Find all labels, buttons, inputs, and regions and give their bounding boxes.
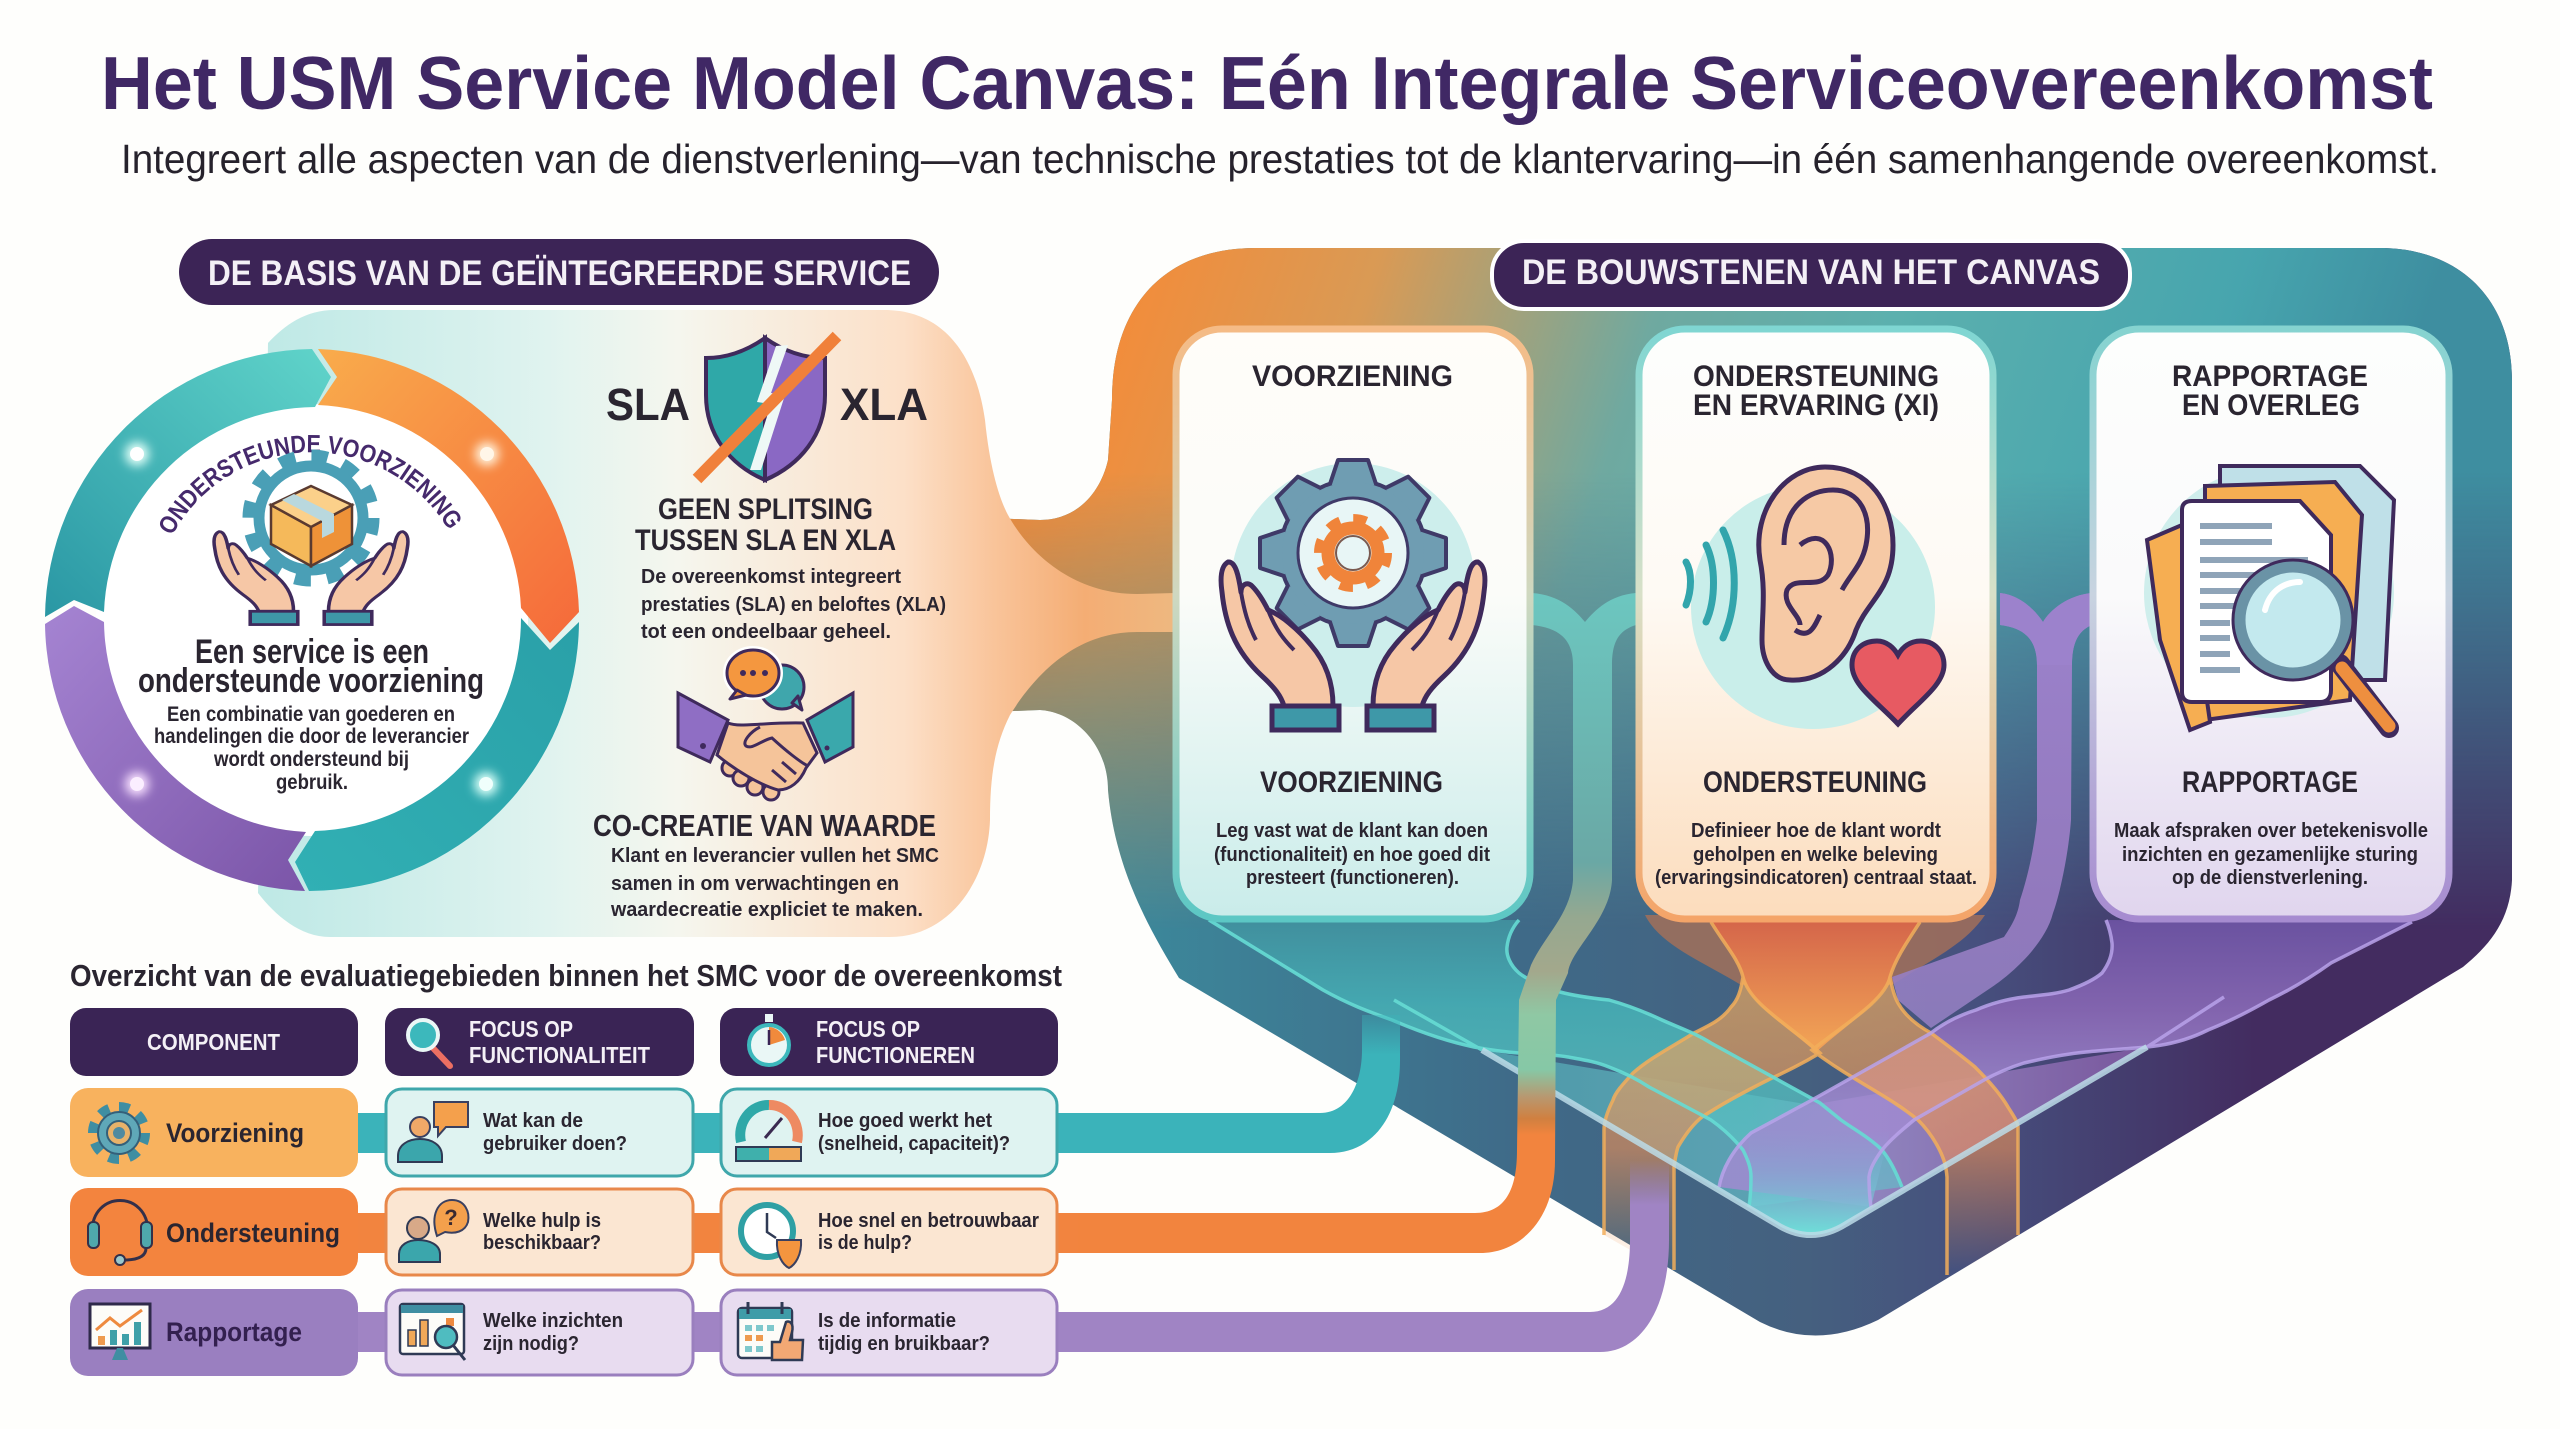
text: service definition: gebruik. — [276, 771, 348, 794]
card: rapportage en overleg: EN OVERLEG — [2182, 389, 2360, 422]
card: rapportage en overleg: RAPPORTAGE — [2182, 766, 2358, 799]
cell: is de informatie: tijdig en bruikbaar? — [818, 1333, 990, 1355]
ribbon: purple Y connector top — [2000, 593, 2092, 665]
text: service definition — [138, 633, 484, 794]
pill: de bouwstenen — [1492, 241, 2130, 309]
cell: hoe snel — [721, 1189, 1057, 1275]
pill: de bouwstenen: DE BOUWSTENEN VAN HET CANVAS — [1522, 253, 2100, 292]
table header: component — [70, 1008, 358, 1076]
text: service definition: ondersteunde voorziening — [138, 662, 484, 700]
table header: focus op functionaliteit — [385, 1008, 694, 1076]
teal ribbon outlines — [1209, 920, 1902, 1207]
text: co-creatie: CO-CREATIE VAN WAARDE — [593, 808, 936, 843]
purple ribbon outlines — [1719, 920, 2412, 1207]
title: Het USM Service Model Canvas: Eén Integrale Serviceovereenkomst — [101, 41, 2433, 125]
cell: welke hulp: Welke hulp is — [483, 1210, 601, 1232]
ring segment: orange top-right — [318, 349, 579, 643]
ring segment: teal lower-right — [295, 618, 579, 891]
cell: is de informatie — [721, 1290, 1057, 1375]
V frame — [1482, 1047, 2147, 1235]
subtitle: Integreert alle aspecten van de dienstverlening—van technische prestaties tot de klantervaring—in één samenhangende overeenkomst. — [121, 136, 2439, 182]
cell: welke hulp: beschikbaar? — [483, 1232, 601, 1254]
curved label — [172, 452, 452, 536]
card: rapportage en overleg — [2093, 329, 2449, 919]
icon: stopwatch — [749, 1014, 789, 1065]
cell: is de informatie: Is de informatie — [818, 1310, 956, 1332]
connector: purple row band — [358, 1160, 1669, 1352]
card: ondersteuning en ervaring: EN ERVARING (XI) — [1693, 389, 1939, 422]
ring segment: teal top-left — [45, 349, 331, 617]
cell: welke hulp — [386, 1189, 693, 1275]
text: geen splitsing: prestaties (SLA) en beloftes (XLA) — [641, 594, 946, 616]
V tip glow — [1749, 1130, 1890, 1235]
purple ribbon — [1719, 920, 2412, 1207]
icon: magnifier — [408, 1020, 450, 1066]
card: voorziening: Leg vast wat de klant kan doen — [1216, 820, 1488, 842]
text: service definition: handelingen die door de leverancier — [154, 725, 469, 748]
card: ondersteuning en ervaring: ONDERSTEUNING — [1703, 766, 1927, 799]
card: ondersteuning en ervaring: geholpen en welke beleving — [1693, 844, 1938, 866]
cell: hoe snel: is de hulp? — [818, 1232, 912, 1254]
text: service definition: Een combinatie van goederen en — [167, 703, 455, 726]
card: voorziening: VOORZIENING — [1252, 360, 1453, 393]
ribbon: teal Y connector into orange row — [1058, 593, 1636, 1253]
card: ondersteuning en ervaring: ONDERSTEUNING — [1693, 360, 1939, 393]
pill: de basis — [179, 239, 939, 305]
row: ondersteuning — [70, 1188, 1057, 1276]
icon: gear with box and hands — [214, 456, 408, 625]
card: rapportage en overleg: Maak afspraken over betekenisvolle — [2114, 820, 2428, 842]
connector: orange row band — [358, 1213, 1078, 1253]
cell: hoe goed werkt het: (snelheid, capaciteit)? — [818, 1133, 1010, 1155]
orange strand outlines — [1604, 922, 2018, 1275]
purple descending stem — [1892, 593, 2092, 1028]
cell: ondersteuning label — [70, 1188, 358, 1276]
card: ondersteuning en ervaring: Definieer hoe de klant wordt — [1691, 820, 1941, 842]
cell: welke hulp: ? — [444, 1205, 458, 1230]
orange strand right — [1812, 977, 2018, 1280]
card: rapportage en overleg: op de dienstverlening. — [2172, 867, 2368, 889]
cell: voorziening label: Voorziening — [166, 1118, 304, 1148]
table header: focus op functionaliteit: FUNCTIONALITEIT — [469, 1042, 650, 1068]
text: geen splitsing — [635, 493, 946, 643]
card: voorziening: VOORZIENING — [1260, 766, 1443, 799]
text: service definition: Een service is een — [195, 633, 429, 671]
block: SLA XLA shield: XLA — [840, 379, 928, 430]
card: voorziening: (functionaliteit) en hoe goed dit — [1214, 844, 1490, 866]
connector: purple row band solid — [358, 1312, 1598, 1352]
table header: focus op functioneren — [720, 1008, 1058, 1076]
text: co-creatie: samen in om verwachtingen en — [611, 873, 899, 895]
row: voorziening — [70, 1088, 1057, 1177]
ring segment: purple lower-left — [45, 606, 306, 891]
card: ondersteuning en ervaring: (ervaringsindicatoren) centraal staat. — [1655, 867, 1977, 889]
cell: wat kan de gebruiker doen: Wat kan de — [483, 1110, 583, 1132]
table heading: Overzicht van de evaluatiegebieden binnen het SMC voor de overeenkomst — [70, 958, 1062, 993]
cell: hoe goed werkt het — [721, 1089, 1057, 1176]
card: rapportage en overleg: RAPPORTAGE — [2172, 360, 2368, 393]
panel: canvas shape background — [990, 248, 2512, 1336]
cell: wat kan de gebruiker doen — [386, 1089, 693, 1176]
orange strand left — [1604, 977, 1820, 1275]
ribbons: central interwoven flow — [1209, 593, 2412, 1280]
ring glow dots — [125, 442, 499, 796]
cell: welke inzichten: Welke inzichten — [483, 1310, 623, 1332]
cell: rapportage label — [70, 1289, 358, 1376]
card: voorziening — [1176, 329, 1530, 919]
text: co-creatie — [593, 808, 939, 921]
cell: welke inzichten — [386, 1290, 693, 1375]
connector: teal row band — [358, 1015, 1400, 1153]
cell: wat kan de gebruiker doen: gebruiker doen? — [483, 1133, 627, 1155]
ring diagram — [45, 349, 579, 891]
pill: de basis: DE BASIS VAN DE GEÏNTEGREERDE SERVICE — [208, 254, 911, 293]
icon: documents with magnifier — [2144, 466, 2394, 730]
cell: hoe snel: Hoe snel en betrouwbaar — [818, 1210, 1039, 1232]
card: voorziening: presteert (functioneren). — [1246, 867, 1459, 889]
cell: voorziening label — [70, 1088, 358, 1177]
table header: focus op functioneren: FOCUS OP — [816, 1016, 920, 1042]
cell: hoe goed werkt het: Hoe goed werkt het — [818, 1110, 992, 1132]
text: service definition: wordt ondersteund bij — [213, 748, 409, 771]
cell: ondersteuning label: Ondersteuning — [166, 1218, 340, 1248]
cell: rapportage label: Rapportage — [166, 1317, 302, 1347]
orange flare at card base — [1645, 915, 1985, 985]
table header: focus op functioneren: FUNCTIONEREN — [816, 1042, 975, 1068]
icon: handshake with speech bubbles — [678, 649, 853, 800]
block: SLA XLA shield — [606, 336, 928, 480]
panel: basis background with connector — [258, 310, 1175, 937]
text: co-creatie: waardecreatie expliciet te maken. — [610, 899, 923, 921]
ring diagram: ONDERSTEUNDE VOORZIENING — [160, 435, 461, 532]
block: SLA XLA shield: SLA — [606, 379, 690, 430]
card: rapportage en overleg: inzichten en gezamenlijke sturing — [2122, 844, 2418, 866]
row: rapportage — [70, 1289, 1057, 1376]
icon: gears in hands — [1221, 460, 1485, 730]
orange centre — [1711, 920, 1920, 1052]
icon: ear with heart — [1686, 467, 1944, 729]
text: geen splitsing: De overeenkomst integreert — [641, 566, 901, 588]
teal ribbon — [1209, 920, 1902, 1207]
cell: welke inzichten: zijn nodig? — [483, 1333, 579, 1355]
text: geen splitsing: TUSSEN SLA EN XLA — [635, 524, 896, 557]
table header: component: COMPONENT — [147, 1029, 280, 1055]
text: geen splitsing: GEEN SPLITSING — [658, 493, 873, 526]
table header: focus op functionaliteit: FOCUS OP — [469, 1016, 573, 1042]
V base — [1482, 1047, 2147, 1235]
text: co-creatie: Klant en leverancier vullen het SMC — [611, 845, 939, 867]
text: geen splitsing: tot een ondeelbaar geheel. — [641, 621, 891, 643]
card: ondersteuning en ervaring — [1639, 329, 1993, 919]
